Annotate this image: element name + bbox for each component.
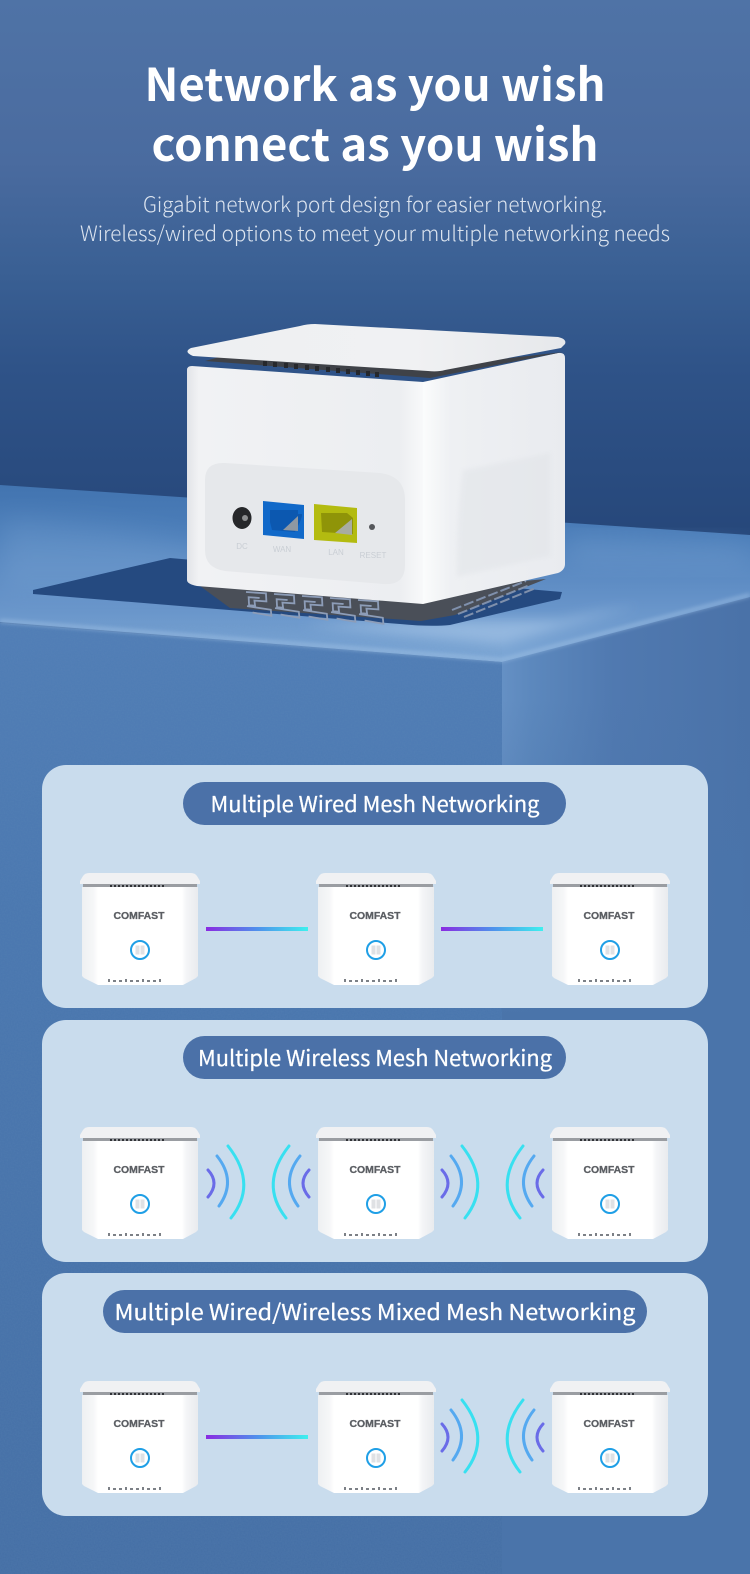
platform block [0,485,750,1574]
router 1: COMFAST [114,1164,165,1176]
router 3: COMFAST [584,1164,635,1176]
router 1 [80,873,200,985]
router body [187,366,423,604]
WAN port [263,501,304,539]
title [144,49,606,174]
router 1 [80,1127,200,1239]
DC jack [232,507,252,529]
router base [200,579,546,621]
router 3 [550,1127,670,1239]
router 3: COMFAST [584,910,635,922]
port labels: LAN [328,548,344,557]
router 2 [316,1127,436,1239]
port labels [236,542,386,560]
router 1 [80,1381,200,1493]
router 1: COMFAST [114,910,165,922]
subtitle [80,189,670,248]
LAN port [314,504,357,543]
panel: mixed mesh [42,1273,708,1516]
router 2: COMFAST [350,1418,401,1430]
vent slot [205,352,563,378]
base vents [244,581,536,624]
router shadow [33,558,562,626]
router 3 [550,1381,670,1493]
title: Network as you wish [144,49,606,114]
title: connect as you wish [152,109,598,174]
port labels: WAN [273,545,291,554]
router 2: COMFAST [350,1164,401,1176]
subtitle: Gigabit network port design for easier networking. [143,189,607,219]
heading: mixed: Multiple Wired/Wireless Mixed Mesh Networking [114,1295,636,1327]
wireless waves 3 [442,1146,478,1218]
panel: wireless mesh [42,1020,708,1262]
heading: mixed [103,1290,647,1333]
wireless waves 4 [507,1146,543,1218]
wireless waves 2 [507,1400,543,1472]
wireless waves 1 [208,1146,244,1218]
heading: wired [183,782,566,825]
wire link 1 [206,927,308,931]
heading: wireless [183,1036,566,1079]
wireless waves 2 [273,1146,309,1218]
reset hole [369,524,375,530]
port panel [205,463,405,584]
subtitle: Wireless/wired options to meet your multiple networking needs [80,218,670,248]
port labels: RESET [360,551,386,560]
top plate [187,324,565,371]
router 2 [316,1381,436,1493]
wire link [206,1435,308,1439]
router 3 [550,873,670,985]
hero router [187,324,565,624]
panel: wired mesh [42,765,708,1008]
router 3: COMFAST [584,1418,635,1430]
heading: wireless: Multiple Wireless Mesh Networking [198,1041,553,1073]
wireless waves 1 [442,1400,478,1472]
heading: wired: Multiple Wired Mesh Networking [210,787,540,819]
port labels: DC [236,542,248,551]
router 2: COMFAST [350,910,401,922]
wire link 2 [441,927,543,931]
router 1: COMFAST [114,1418,165,1430]
router 2 [316,873,436,985]
